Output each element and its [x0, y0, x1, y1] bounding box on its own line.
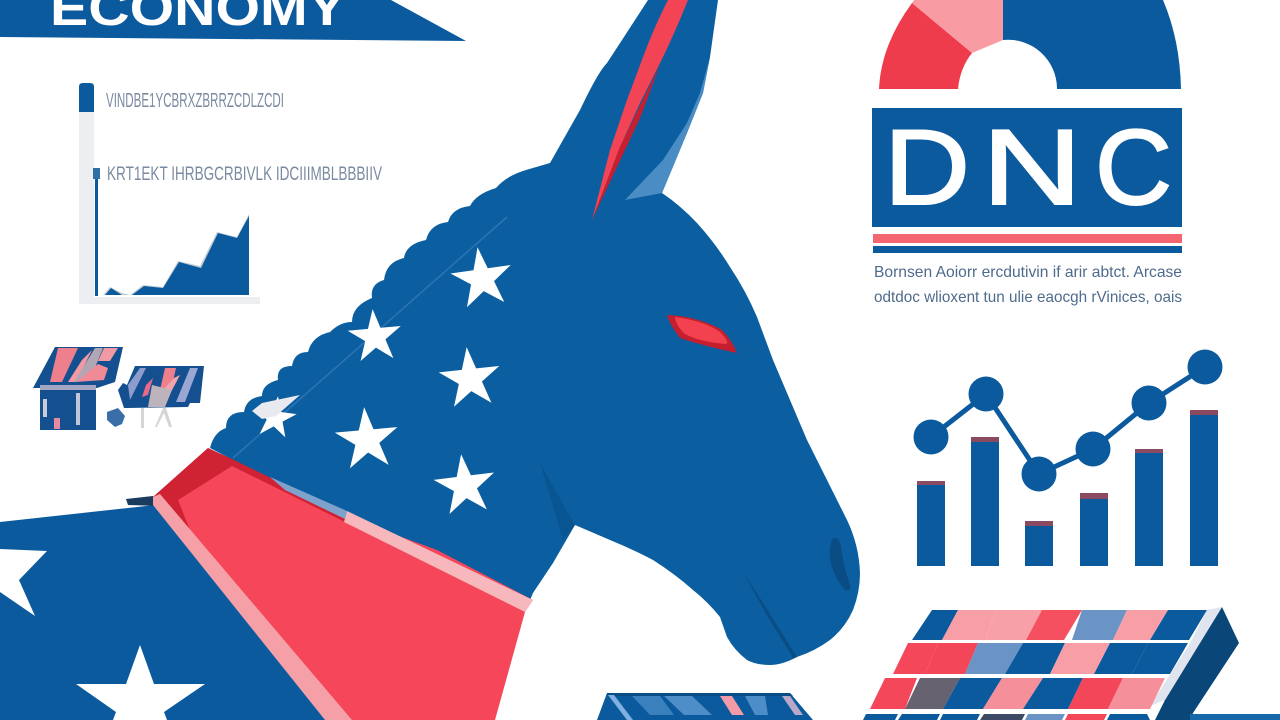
caption: odtdoc wlioxent tun ulie eaocgh rVinices, oais — [874, 289, 1182, 306]
scarf pink trim — [153, 494, 352, 720]
area chart with labels: KRT1EKT IHRBGCRBIVLK IDCIIIMBLBBBIIV — [107, 164, 382, 185]
isometric tile heatmap — [863, 607, 1280, 720]
banner: economy heading — [0, 0, 466, 41]
ear inner red — [592, 0, 688, 220]
DNC banner — [872, 107, 1182, 227]
body with stars — [0, 496, 335, 720]
mane highlight patch — [252, 395, 300, 419]
star: body left — [0, 549, 47, 616]
jaw shadow — [540, 463, 575, 540]
neck highlight line — [233, 217, 507, 458]
icon: small voting booths — [33, 347, 204, 430]
red scarf — [153, 448, 533, 720]
half-circle gauge — [879, 0, 1181, 89]
nostril — [830, 538, 850, 590]
ear light highlight — [625, 57, 710, 200]
caption: Bornsen Aoiorr ercdutivin if arir abtct. Arcase — [874, 264, 1182, 281]
area chart with labels — [79, 83, 382, 304]
stars on neck — [252, 243, 516, 515]
mouth line — [743, 572, 797, 658]
DNC banner: C — [1095, 107, 1172, 227]
donkey head and neck — [210, 0, 860, 665]
DNC banner: D — [884, 107, 970, 227]
bottom ballot box — [597, 693, 813, 720]
panel: DNC logo — [872, 0, 1182, 306]
bar and line chart — [914, 350, 1222, 566]
star: body bottom — [76, 645, 205, 720]
DNC banner: N — [982, 107, 1082, 227]
area chart with labels: VINDBE1YCBRXZBRRZCDLZCDI — [106, 90, 284, 112]
eye — [667, 315, 737, 353]
caption — [874, 264, 1182, 306]
